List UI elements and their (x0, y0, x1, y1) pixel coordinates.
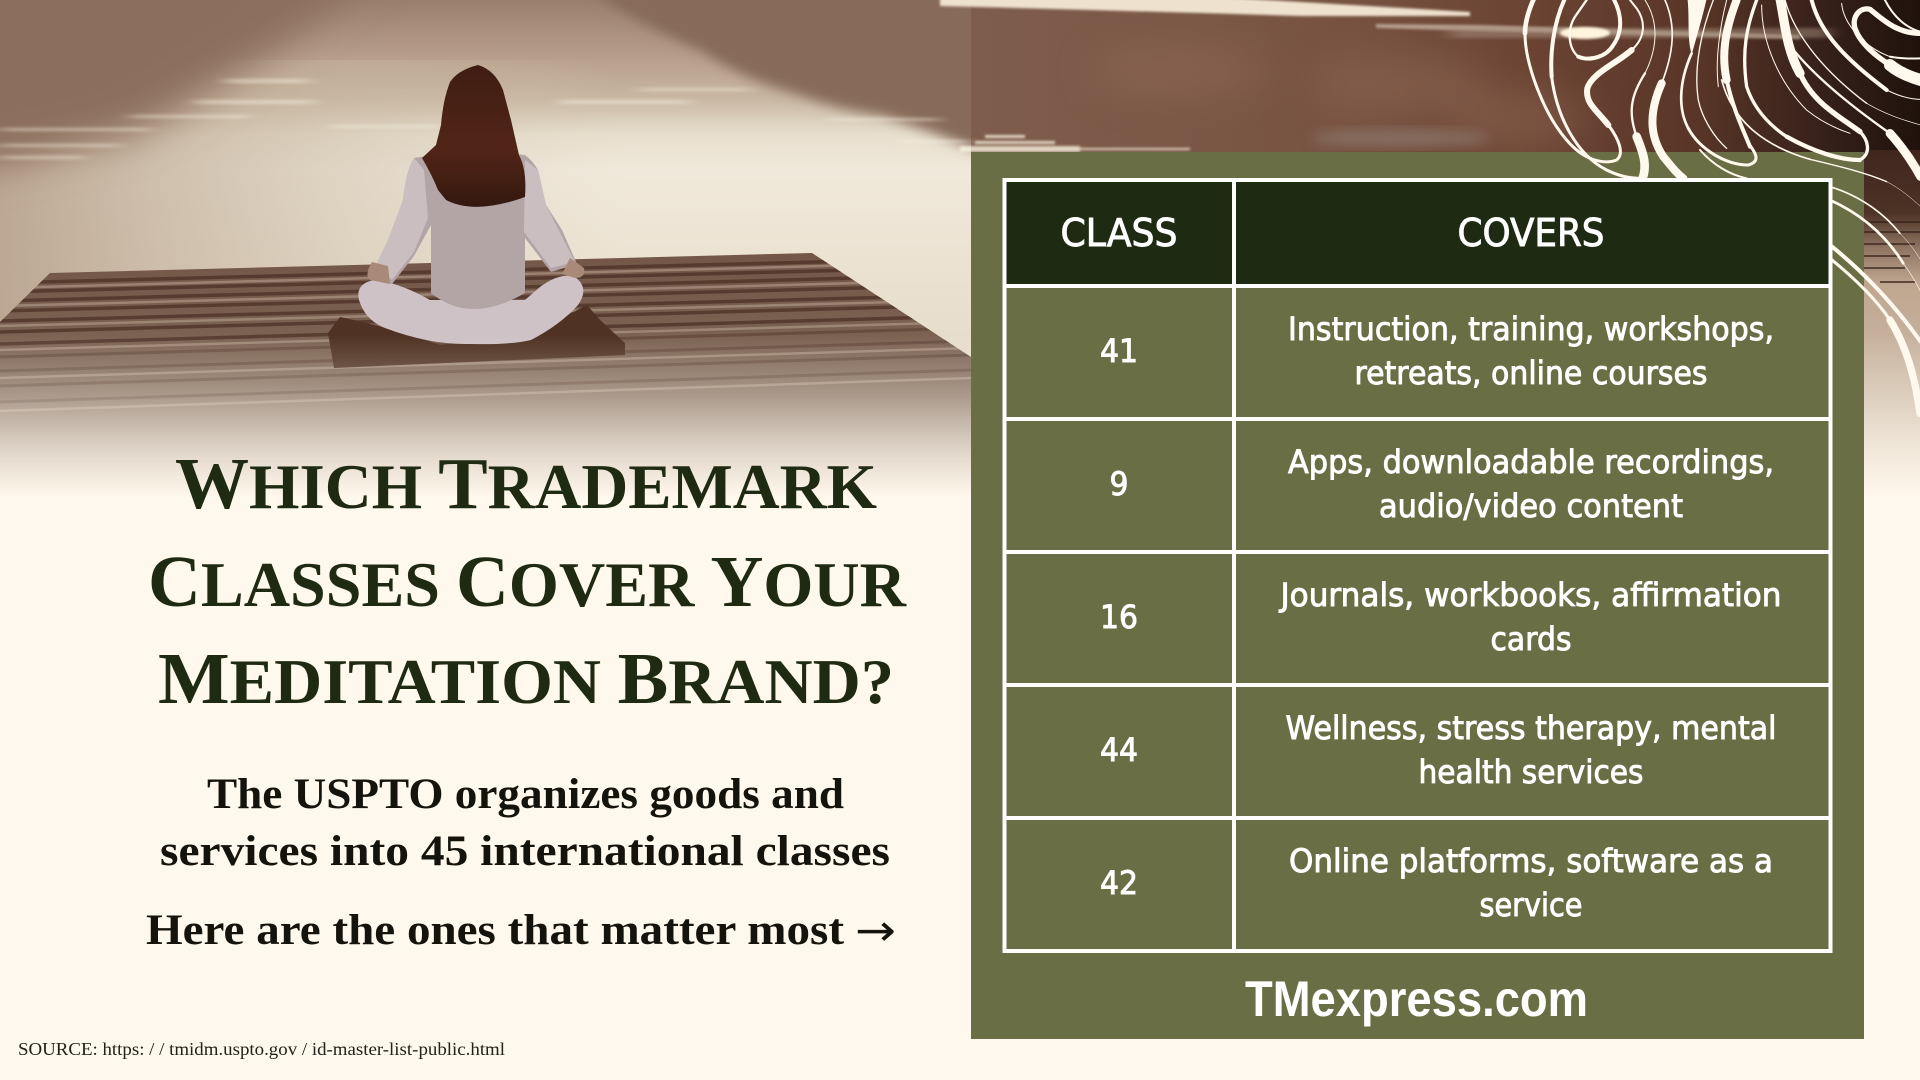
waterline glints at panel top (960, 135, 1190, 152)
arms highlight (376, 158, 575, 280)
row: class 9: Apps, downloadable recordings, (1288, 443, 1774, 481)
intro text: services into 45 international classes (160, 828, 890, 875)
hair (422, 65, 525, 207)
table (1003, 179, 1832, 952)
tan shading on left of the lake (0, 60, 439, 322)
legs (358, 276, 583, 344)
header: class: CLASS (1060, 211, 1178, 255)
row: class 16: cards (1490, 620, 1572, 658)
dark lake far right (971, 0, 1920, 152)
table rows background (1003, 287, 1832, 952)
row: class 42: 42 (1100, 864, 1138, 902)
row: class 16: 16 (1100, 598, 1138, 636)
cushion (328, 305, 625, 368)
left reflection of far shore (0, 0, 400, 165)
water ripples (0, 79, 970, 159)
row: class 42: Online platforms, software as a (1289, 842, 1773, 880)
title (148, 443, 907, 719)
dock (0, 253, 971, 482)
row: class 16: Journals, workbooks, affirmation (1279, 576, 1782, 614)
row: class 41: 41 (1100, 332, 1138, 370)
row: class 44: health services (1418, 753, 1644, 791)
title: MEDITATION BRAND? (158, 638, 894, 719)
photo: woman meditating on a dock by a lake (0, 0, 1920, 500)
row: class 41: Instruction, training, workshops, (1288, 310, 1774, 348)
title: CLASSES COVER YOUR (148, 541, 907, 622)
row: class 9: audio/video content (1379, 487, 1683, 525)
panel: trademark classes (971, 152, 1864, 1039)
header: covers: COVERS (1458, 211, 1604, 255)
source note: SOURCE: https: / / tmidm.uspto.gov / id-master-list-public.html (18, 1039, 505, 1059)
pale shoreline band (940, 0, 1470, 16)
call to action with arrow: → (855, 906, 896, 956)
call to action with arrow: Here are the ones that matter most (146, 907, 845, 954)
hands (367, 258, 584, 284)
right reflection of far shore (590, 0, 990, 150)
torso and arms (376, 152, 577, 309)
woman (358, 65, 584, 344)
intro text (160, 771, 890, 875)
row: class 44: 44 (1100, 731, 1138, 769)
intro text: The USPTO organizes goods and (207, 771, 844, 818)
row: class 41: retreats, online courses (1354, 354, 1708, 392)
table grid (1004, 180, 1830, 951)
title: WHICH TRADEMARK (175, 443, 877, 524)
sun glint (1560, 27, 1610, 39)
row: class 42: service (1480, 886, 1582, 924)
row: class 9: 9 (1110, 465, 1128, 503)
row: class 42 (1100, 842, 1773, 924)
row: class 41 (1100, 310, 1774, 392)
row: class 16 (1100, 576, 1782, 658)
mottled reeds reflection (1138, 57, 1580, 150)
table header (1003, 179, 1832, 287)
row: class 9 (1110, 443, 1774, 525)
row: class 44: Wellness, stress therapy, mental (1286, 709, 1776, 747)
row: class 44 (1100, 709, 1776, 791)
website footer: TMexpress.com (1245, 971, 1588, 1027)
right strip of lake below panel top (1864, 150, 1920, 453)
decorative swirl lines over panel and photo (1525, 0, 1920, 413)
